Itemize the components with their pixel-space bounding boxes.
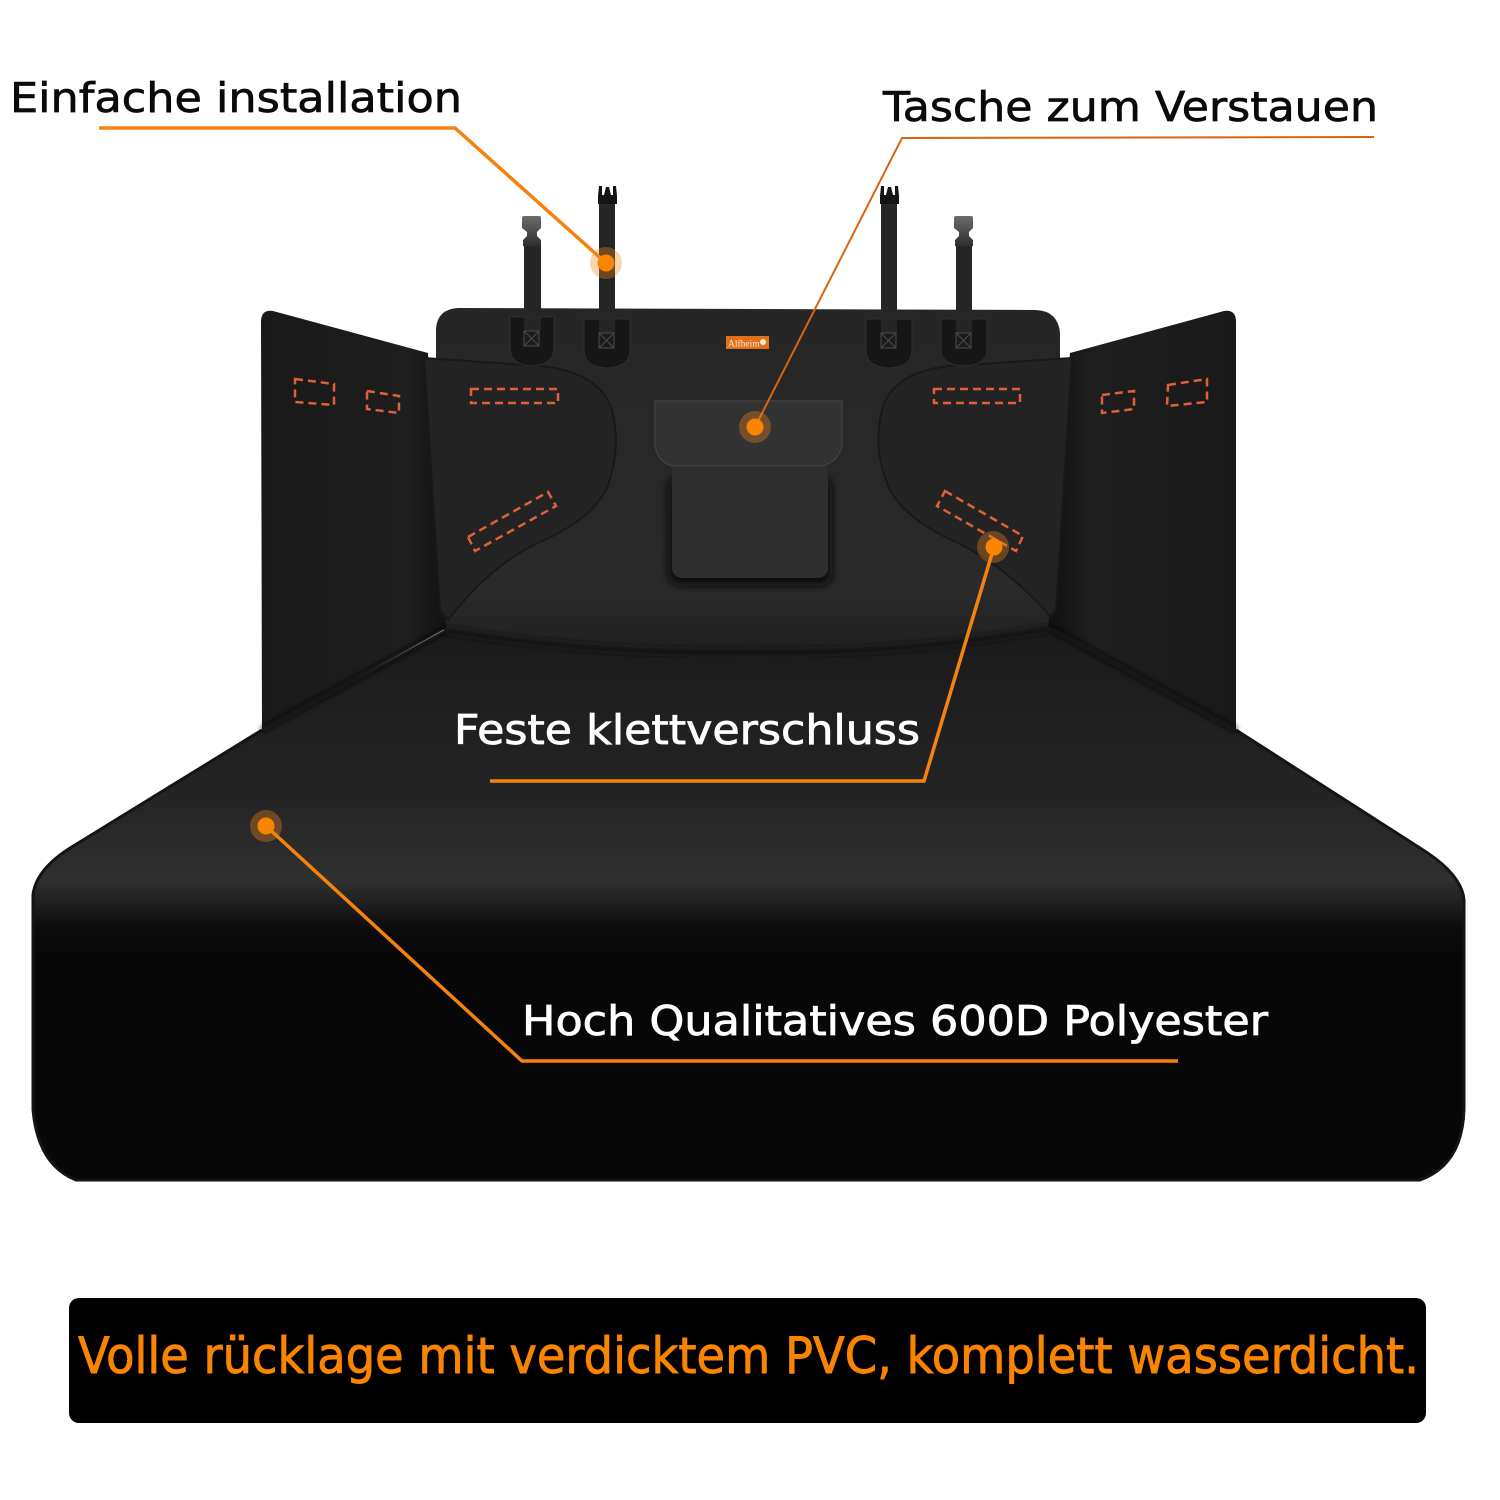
- floor front edge rim: [33, 730, 1464, 1180]
- back panel: [436, 308, 1060, 670]
- label: Feste klettverschluss: Feste klettverschluss: [454, 706, 920, 754]
- label: Hoch Qualitatives 600D Polyester: Hoch Qualitatives 600D Polyester: [522, 997, 1268, 1045]
- product: trunk cover: [33, 186, 1464, 1180]
- left outer strap: [510, 216, 554, 366]
- pocket: [655, 401, 842, 586]
- callout: Feste klettverschluss line and dot: [490, 531, 1009, 781]
- left inner strap: [584, 186, 630, 368]
- brand tag: Alfheim: [728, 338, 760, 350]
- right side wing: [1048, 311, 1236, 732]
- pocket flap: [655, 401, 842, 466]
- pocket body: [672, 462, 828, 578]
- callout: Polyester line and dot: [250, 810, 1178, 1061]
- velcro stitches: [295, 379, 1207, 551]
- brand tag: [726, 336, 769, 350]
- label: Tasche zum Verstauen: Tasche zum Verstauen: [882, 83, 1378, 131]
- banner text: Volle rücklage mit verdicktem PVC, komplett wasserdicht.: [78, 1327, 1419, 1385]
- pocket shadow: [668, 476, 832, 586]
- banner: [69, 1298, 1426, 1423]
- callout: Tasche zum Verstauen line and dot: [739, 137, 1374, 443]
- floor and front drop: [33, 628, 1464, 1180]
- callout: Einfache installation line and dot: [99, 128, 622, 279]
- label: Einfache installation: Einfache installation: [10, 74, 462, 122]
- right outer strap: [941, 216, 987, 366]
- left side wing: [261, 311, 446, 732]
- seam floor top: [445, 628, 1050, 652]
- right inner strap: [866, 186, 912, 368]
- left flap: [424, 358, 616, 620]
- right flap: [878, 358, 1072, 616]
- seam between floor and wings: [262, 628, 1236, 730]
